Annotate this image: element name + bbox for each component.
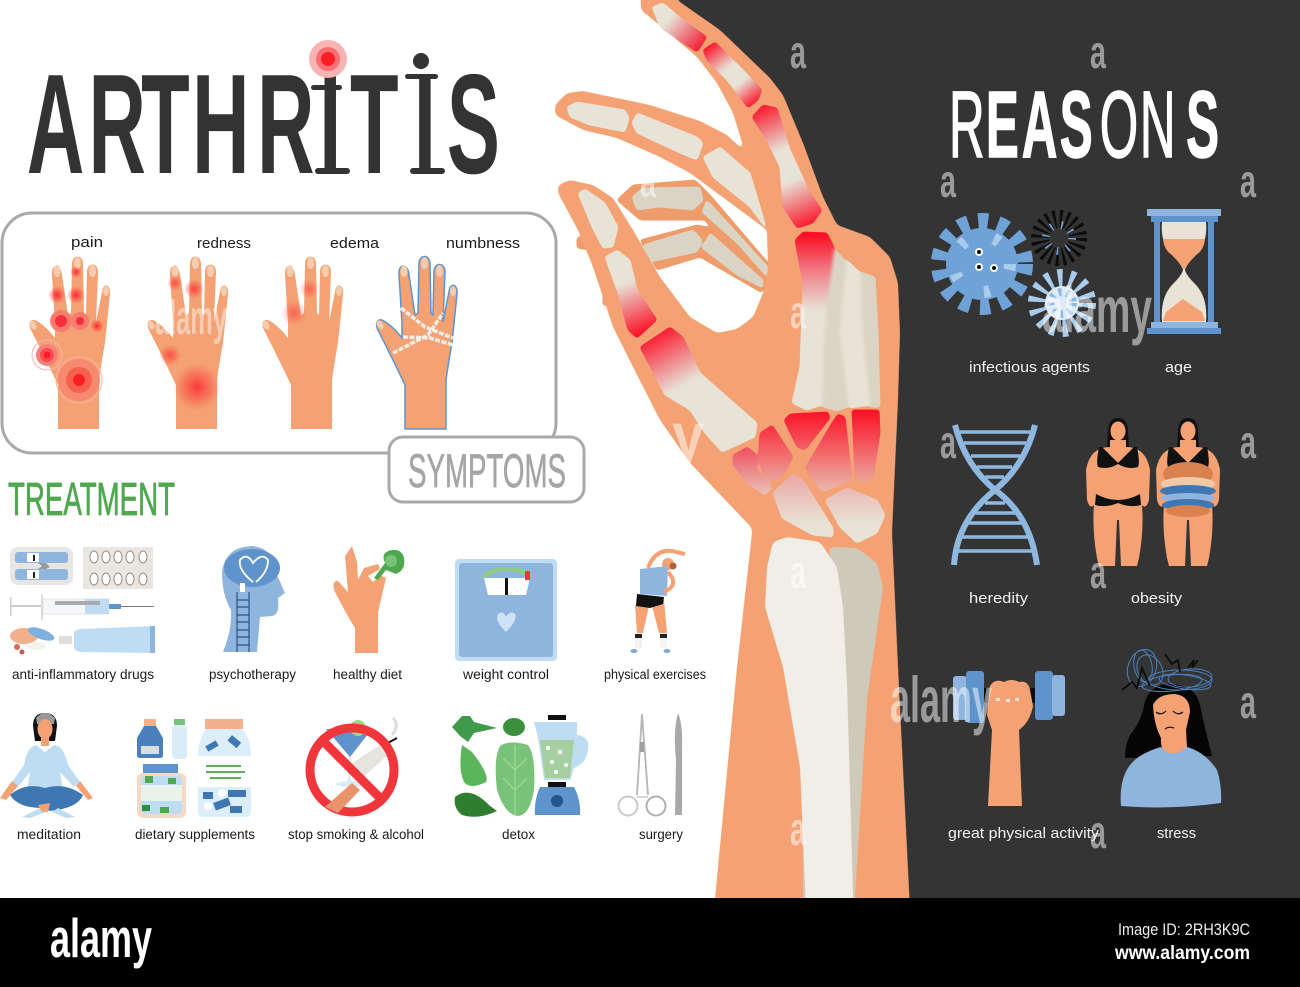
label: edema: edema xyxy=(330,235,380,252)
icon: vegetables and blender xyxy=(452,715,588,817)
icon: bathroom scale xyxy=(455,559,557,661)
radius xyxy=(765,537,854,930)
dark panel: reasons background xyxy=(677,0,1300,898)
treatment item: surgery xyxy=(618,713,683,842)
label: surgery xyxy=(639,827,683,842)
icon: fist with dumbbell xyxy=(953,671,1065,806)
label: stress xyxy=(1157,826,1196,842)
watermark: alamy marks: a xyxy=(640,155,656,207)
ulna xyxy=(803,547,883,930)
back fingers xyxy=(577,180,770,307)
metacarpal bones xyxy=(792,232,880,411)
watermark: alamy marks: y xyxy=(672,399,704,472)
icon: overweight woman xyxy=(1086,418,1150,566)
serifs and dot xyxy=(311,53,445,174)
watermark: alamy marks: a xyxy=(940,155,956,207)
reason: stress xyxy=(1121,645,1221,842)
icon: woman with burger belly xyxy=(1156,418,1220,566)
watermark: alamy marks: a xyxy=(1240,416,1256,468)
icon: bottles and jars xyxy=(137,719,251,818)
watermark: alamy marks: alamy xyxy=(890,663,992,736)
label: physical exercises xyxy=(604,667,706,682)
icon: small black virus xyxy=(1040,219,1078,257)
watermark: alamy marks: a xyxy=(790,803,806,855)
icon: numb hand with chains xyxy=(375,256,457,429)
icon: pens box xyxy=(10,547,73,585)
watermark: alamy marks: a xyxy=(1240,155,1256,207)
icon: large blue virus xyxy=(943,225,1021,303)
icon: pain target on the i xyxy=(309,40,347,78)
anatomical hand with bones and inflamed joints xyxy=(555,0,911,930)
icon: DNA helix xyxy=(954,425,1037,565)
treatment item: stop smoking & alcohol xyxy=(288,718,424,842)
watermark: alamy marks: a xyxy=(940,416,956,468)
tab: symptoms label: SYMPTOMS xyxy=(408,444,566,497)
treatment item: physical exercises xyxy=(604,551,706,682)
watermark: alamy marks: a xyxy=(790,546,806,598)
watermark: alamy marks: a xyxy=(790,286,806,338)
treatment item: healthy diet xyxy=(333,546,404,682)
watermark: alamy marks: a xyxy=(790,26,806,78)
hand silhouette xyxy=(555,0,911,930)
watermark: alamy marks: a xyxy=(1090,546,1106,598)
tab: symptoms label xyxy=(389,437,584,502)
treatment item: meditation xyxy=(0,713,93,842)
watermark: alamy marks xyxy=(155,26,1256,858)
watermark: alamy marks: alamy xyxy=(1042,273,1152,346)
icon: no smoking and alcohol xyxy=(310,718,397,813)
icon: hand with redness xyxy=(146,256,228,429)
icon: woman exercising xyxy=(630,551,685,653)
icon: hand with edema xyxy=(261,256,343,429)
treatment item: dietary supplements xyxy=(135,719,255,842)
icon: pale spiky virus xyxy=(1040,281,1084,325)
logo: alamy: alamy xyxy=(50,907,152,969)
icon: stressed woman with scribbles xyxy=(1121,645,1221,807)
label: great physical activity xyxy=(948,826,1100,842)
label: weight control xyxy=(462,667,549,682)
label: healthy diet xyxy=(333,667,402,682)
thumb bones xyxy=(578,189,757,452)
heading: reasons: REASONS xyxy=(949,72,1219,178)
icon: hand holding broccoli xyxy=(334,546,404,653)
watermark: alamy marks: a xyxy=(1090,26,1106,78)
label: age xyxy=(1165,360,1192,376)
label: stop smoking & alcohol xyxy=(288,827,424,842)
label: redness: redness xyxy=(197,235,251,252)
label: dietary supplements xyxy=(135,827,255,842)
reason: great physical activity xyxy=(948,671,1100,842)
icon: syringe xyxy=(10,594,154,620)
label: anti-inflammatory drugs xyxy=(12,667,154,682)
icon: clamps and scalpel xyxy=(618,713,682,816)
icon: blister pack xyxy=(83,547,153,589)
image id: Image ID: 2RH3K9C xyxy=(1118,920,1250,939)
reason: age xyxy=(1147,209,1221,376)
panel: symptoms xyxy=(2,213,556,453)
icon: hourglass xyxy=(1147,209,1221,334)
watermark: alamy marks: a xyxy=(1240,676,1256,728)
top finger bones xyxy=(652,3,822,228)
icon: head with heart and ladder xyxy=(222,546,285,652)
back finger bones xyxy=(632,187,768,288)
label: numbness: numbness xyxy=(446,235,520,252)
treatment item: anti-inflammatory drugs xyxy=(10,547,155,682)
label: psychotherapy xyxy=(209,667,296,682)
title: ARTHRITIS: ARTHRITIS xyxy=(27,46,500,204)
footer: alamy stock bar xyxy=(0,898,1300,987)
treatment item: weight control xyxy=(455,559,557,682)
watermark: alamy marks: a xyxy=(1090,806,1106,858)
treatment item: detox xyxy=(452,715,588,842)
label: heredity xyxy=(969,591,1029,607)
treatment item: psychotherapy xyxy=(209,546,296,682)
reason: obesity xyxy=(1086,418,1220,607)
icon: hand with pain targets xyxy=(28,256,110,429)
watermark: alamy marks: alamy xyxy=(155,292,227,345)
label: meditation xyxy=(17,827,81,842)
url: www.alamy.com xyxy=(1114,943,1250,964)
label: pain: pain xyxy=(71,234,103,251)
reason: heredity xyxy=(954,425,1037,607)
icon: ointment tube and jar xyxy=(10,625,155,654)
carpal bones xyxy=(733,410,885,543)
label: detox xyxy=(502,827,535,842)
icon: meditating woman xyxy=(0,713,93,818)
heading: treatment: TREATMENT xyxy=(8,473,175,525)
label: obesity xyxy=(1131,591,1183,607)
second finger bones xyxy=(567,102,767,230)
label: infectious agents xyxy=(969,360,1090,376)
reason: infectious agents xyxy=(943,219,1090,376)
